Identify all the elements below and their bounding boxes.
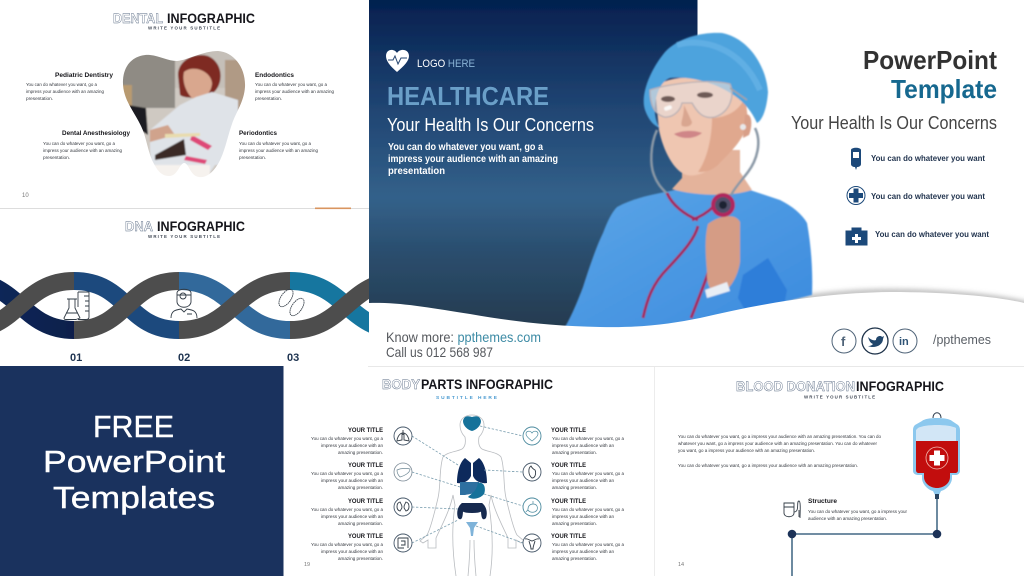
panel: healthcare hero <box>369 0 1024 368</box>
item: intestines text <box>311 534 384 561</box>
item: intestines text: amazing presentation. <box>338 556 383 561</box>
icon: kidneys <box>394 498 412 516</box>
panel: body parts infographic slide <box>284 366 1024 576</box>
heading: dental infographic: INFOGRAPHIC <box>167 10 255 26</box>
text block: endodontics: Endodontics <box>255 73 295 79</box>
labels: step numbers: 02 <box>178 352 190 364</box>
item: liver text: impress your audience with an <box>321 478 384 483</box>
icon: spleen <box>523 463 541 481</box>
text block: periodontics: Periodontics <box>239 131 278 137</box>
item: stomach text: impress your audience with an <box>552 514 615 519</box>
text block: structure <box>808 499 908 521</box>
curve shadow <box>690 292 1024 320</box>
text block: contact <box>386 329 541 360</box>
item: heart text <box>551 428 625 455</box>
item: liver text: You can do whatever you want, go a <box>311 471 384 476</box>
item: spleen text: amazing presentation. <box>552 485 597 490</box>
icon: lab flask and cylinder <box>64 292 89 320</box>
text block: hero description: impress your audience with an amazing <box>388 154 558 165</box>
icon: iv bag <box>851 148 861 170</box>
heading: powerpoint template: PowerPoint <box>863 45 997 75</box>
item: kidneys text: amazing presentation. <box>338 521 383 526</box>
item: intestines text: You can do whatever you want, go a <box>311 542 384 547</box>
bullet text 1: You can do whatever you want <box>871 153 985 163</box>
icon: bacteria <box>276 287 307 318</box>
icon: liver <box>394 463 412 481</box>
dot: left node <box>788 530 796 538</box>
text block: dental anesthesiology: Dental Anesthesiology <box>62 131 131 137</box>
photo: dentist in tooth shape <box>120 48 250 180</box>
text block: pediatric dentistry: You can do whatever you want, go a <box>26 82 98 87</box>
illustration: body outline <box>420 415 524 576</box>
heading: dna infographic: WRITE YOUR SUBTITLE <box>148 234 220 239</box>
item: liver text: YOUR TITLE <box>348 463 383 469</box>
heading: body parts infographic: SUBTITLE HERE <box>436 395 498 401</box>
heading: free powerpoint templates: PowerPoint <box>43 444 225 479</box>
text block: intro paragraphs: whatever you want, go a impress your audience with an amazing presentation. You can do whatever <box>678 441 878 446</box>
icon: blood bag <box>913 413 960 499</box>
item: heart text: impress your audience with an <box>552 443 615 448</box>
text block: dental anesthesiology: impress your audience with an amazing <box>43 148 123 153</box>
item: uterus text: impress your audience with an <box>552 549 615 554</box>
heading: powerpoint template: Template <box>891 74 997 104</box>
dot: right node <box>933 530 941 538</box>
illustration: organs <box>457 416 487 536</box>
text block: hero description: You can do whatever you want, go a <box>388 142 543 153</box>
text block: dental anesthesiology: You can do whatever you want, go a <box>43 141 116 146</box>
heading: powerpoint template <box>863 45 997 104</box>
text block: periodontics: presentation. <box>239 155 266 160</box>
icon: doctor <box>171 289 197 318</box>
chart: dna helix <box>0 281 400 330</box>
item: kidneys text <box>311 499 384 526</box>
panel: dna infographic slide <box>0 208 400 366</box>
item: stomach text: You can do whatever you want, go a <box>552 507 625 512</box>
icon: heart <box>523 427 541 445</box>
heading: body parts infographic <box>382 377 553 401</box>
icon: medical cross circle <box>847 186 865 204</box>
item: uterus text <box>551 534 625 561</box>
heading: blood donation infographic: INFOGRAPHIC <box>856 379 944 394</box>
text block: structure: audience with an amazing presentation. <box>808 516 887 521</box>
icon: stomach <box>523 498 541 516</box>
panel: free powerpoint templates <box>0 366 284 576</box>
heading: dental infographic: DENTAL <box>113 10 163 26</box>
right column icons <box>523 427 541 552</box>
left column icons <box>394 427 412 552</box>
item: intestines text: YOUR TITLE <box>348 534 383 540</box>
text block: pediatric dentistry: presentation. <box>26 96 53 101</box>
illustration: nurse with stethoscope <box>565 33 812 330</box>
text block: structure: Structure <box>808 499 838 505</box>
white curved bottom <box>369 292 1024 368</box>
left column items <box>311 428 384 561</box>
text block: endodontics: impress your audience with an amazing <box>255 89 335 94</box>
item: uterus text: You can do whatever you want, go a <box>552 542 625 547</box>
heading: dental infographic <box>113 10 255 30</box>
icon: uterus <box>523 534 541 552</box>
heading: dna infographic: DNA <box>125 219 153 234</box>
item: spleen text <box>551 463 625 490</box>
icon: twitter <box>862 328 888 354</box>
text block: dental anesthesiology: presentation. <box>43 155 70 160</box>
item: stomach text: amazing presentation. <box>552 521 597 526</box>
text block: intro paragraphs: You can do whatever you want, go a impress your audience with an amazing presentation. You can do <box>678 434 882 439</box>
heading: free powerpoint templates <box>43 409 225 515</box>
item: lungs text: impress your audience with an <box>321 443 384 448</box>
item: spleen text: You can do whatever you want, go a <box>552 471 625 476</box>
text block: periodontics: impress your audience with an amazing <box>239 148 319 153</box>
heading: healthcare: HEALTHCARE <box>387 81 549 111</box>
item: spleen text: YOUR TITLE <box>551 463 586 469</box>
item: spleen text: impress your audience with an <box>552 478 615 483</box>
right column items <box>551 428 625 561</box>
heading: dna infographic: INFOGRAPHIC <box>157 219 245 234</box>
labels: step numbers: 01 <box>70 352 82 364</box>
text block: contact: Call us 012 568 987 <box>386 344 493 360</box>
item: kidneys text: YOUR TITLE <box>348 499 383 505</box>
text block: hero description: presentation <box>388 166 445 177</box>
item: liver text: amazing presentation. <box>338 485 383 490</box>
icon: lungs <box>394 427 412 445</box>
dashed connector lines <box>412 426 523 543</box>
text block: structure: You can do whatever you want, go a impress your <box>808 509 908 514</box>
heading: dna infographic <box>125 219 245 239</box>
subheading: your health is our concerns: Your Health Is Our Concerns <box>387 115 594 135</box>
text block: pediatric dentistry: Pediatric Dentistry <box>55 73 114 79</box>
connector lines <box>792 494 937 576</box>
page number 19: 19 <box>304 562 310 568</box>
icon: linkedin <box>893 329 917 353</box>
item: lungs text: YOUR TITLE <box>348 428 383 434</box>
text block: endodontics: You can do whatever you want, go a <box>255 82 328 87</box>
item: lungs text: amazing presentation. <box>338 450 383 455</box>
icon: iv structure <box>784 501 800 518</box>
page number 10: 10 <box>22 193 29 199</box>
heading: blood donation infographic: WRITE YOUR SUBTITLE <box>804 394 875 400</box>
item: lungs text <box>311 428 384 455</box>
text block: dental anesthesiology <box>43 131 131 160</box>
item: uterus text: amazing presentation. <box>552 556 597 561</box>
page number 14: 14 <box>678 562 684 568</box>
item: kidneys text: You can do whatever you want, go a <box>311 507 384 512</box>
heading: body parts infographic: PARTS INFOGRAPHIC <box>421 377 553 392</box>
text block: intro paragraphs: You can do whatever you want, go a impress your audience with an amazing presentation. <box>678 463 858 468</box>
heading: free powerpoint templates: FREE <box>93 409 174 444</box>
heading: blood donation infographic <box>736 379 944 400</box>
icon: facebook: f <box>841 334 846 349</box>
labels: step numbers: 03 <box>287 352 299 364</box>
heading: blood donation infographic: BLOOD DONATION <box>736 379 855 394</box>
icon: facebook <box>832 329 856 353</box>
panel: blood donation infographic slide <box>654 367 1024 576</box>
text block: intro paragraphs: you want, go a impress your audience with an amazing presentation. <box>678 448 815 453</box>
heading: body parts infographic: BODY <box>382 377 420 392</box>
text block: periodontics <box>239 131 319 160</box>
heading: free powerpoint templates: Templates <box>53 480 215 515</box>
panel: dental infographic slide <box>22 13 334 197</box>
text block: contact: Know more: ppthemes.com <box>386 329 541 345</box>
text block: intro paragraphs <box>678 434 882 468</box>
item: heart text: amazing presentation. <box>552 450 597 455</box>
icon: linkedin: in <box>899 336 909 348</box>
logo heart <box>386 50 409 72</box>
item: uterus text: YOUR TITLE <box>551 534 586 540</box>
item: lungs text: You can do whatever you want, go a <box>311 436 384 441</box>
bullet text 2: You can do whatever you want <box>871 191 985 201</box>
icon: intestines <box>394 534 412 552</box>
item: liver text <box>311 463 384 490</box>
text block: endodontics: presentation. <box>255 96 282 101</box>
item: intestines text: impress your audience with an <box>321 549 384 554</box>
text block: periodontics: You can do whatever you want, go a <box>239 141 312 146</box>
item: heart text: You can do whatever you want, go a <box>552 436 625 441</box>
subheading: your health is our concerns right: Your Health Is Our Concerns <box>791 113 997 133</box>
text block: pediatric dentistry: impress your audience with an amazing <box>26 89 105 94</box>
heading: dental infographic: WRITE YOUR SUBTITLE <box>148 26 220 30</box>
social handle: /ppthemes <box>933 332 991 347</box>
text block: hero description <box>388 142 558 177</box>
text block: pediatric dentistry <box>26 73 114 101</box>
item: stomach text: YOUR TITLE <box>551 499 586 505</box>
text block: endodontics <box>255 73 335 101</box>
bullet text 3: You can do whatever you want <box>875 229 989 239</box>
item: kidneys text: impress your audience with an <box>321 514 384 519</box>
icon: medical case <box>846 228 867 245</box>
labels: step numbers <box>70 352 299 364</box>
logo text: LOGO HERE <box>417 58 475 70</box>
item: heart text: YOUR TITLE <box>551 428 586 434</box>
item: stomach text <box>551 499 625 526</box>
